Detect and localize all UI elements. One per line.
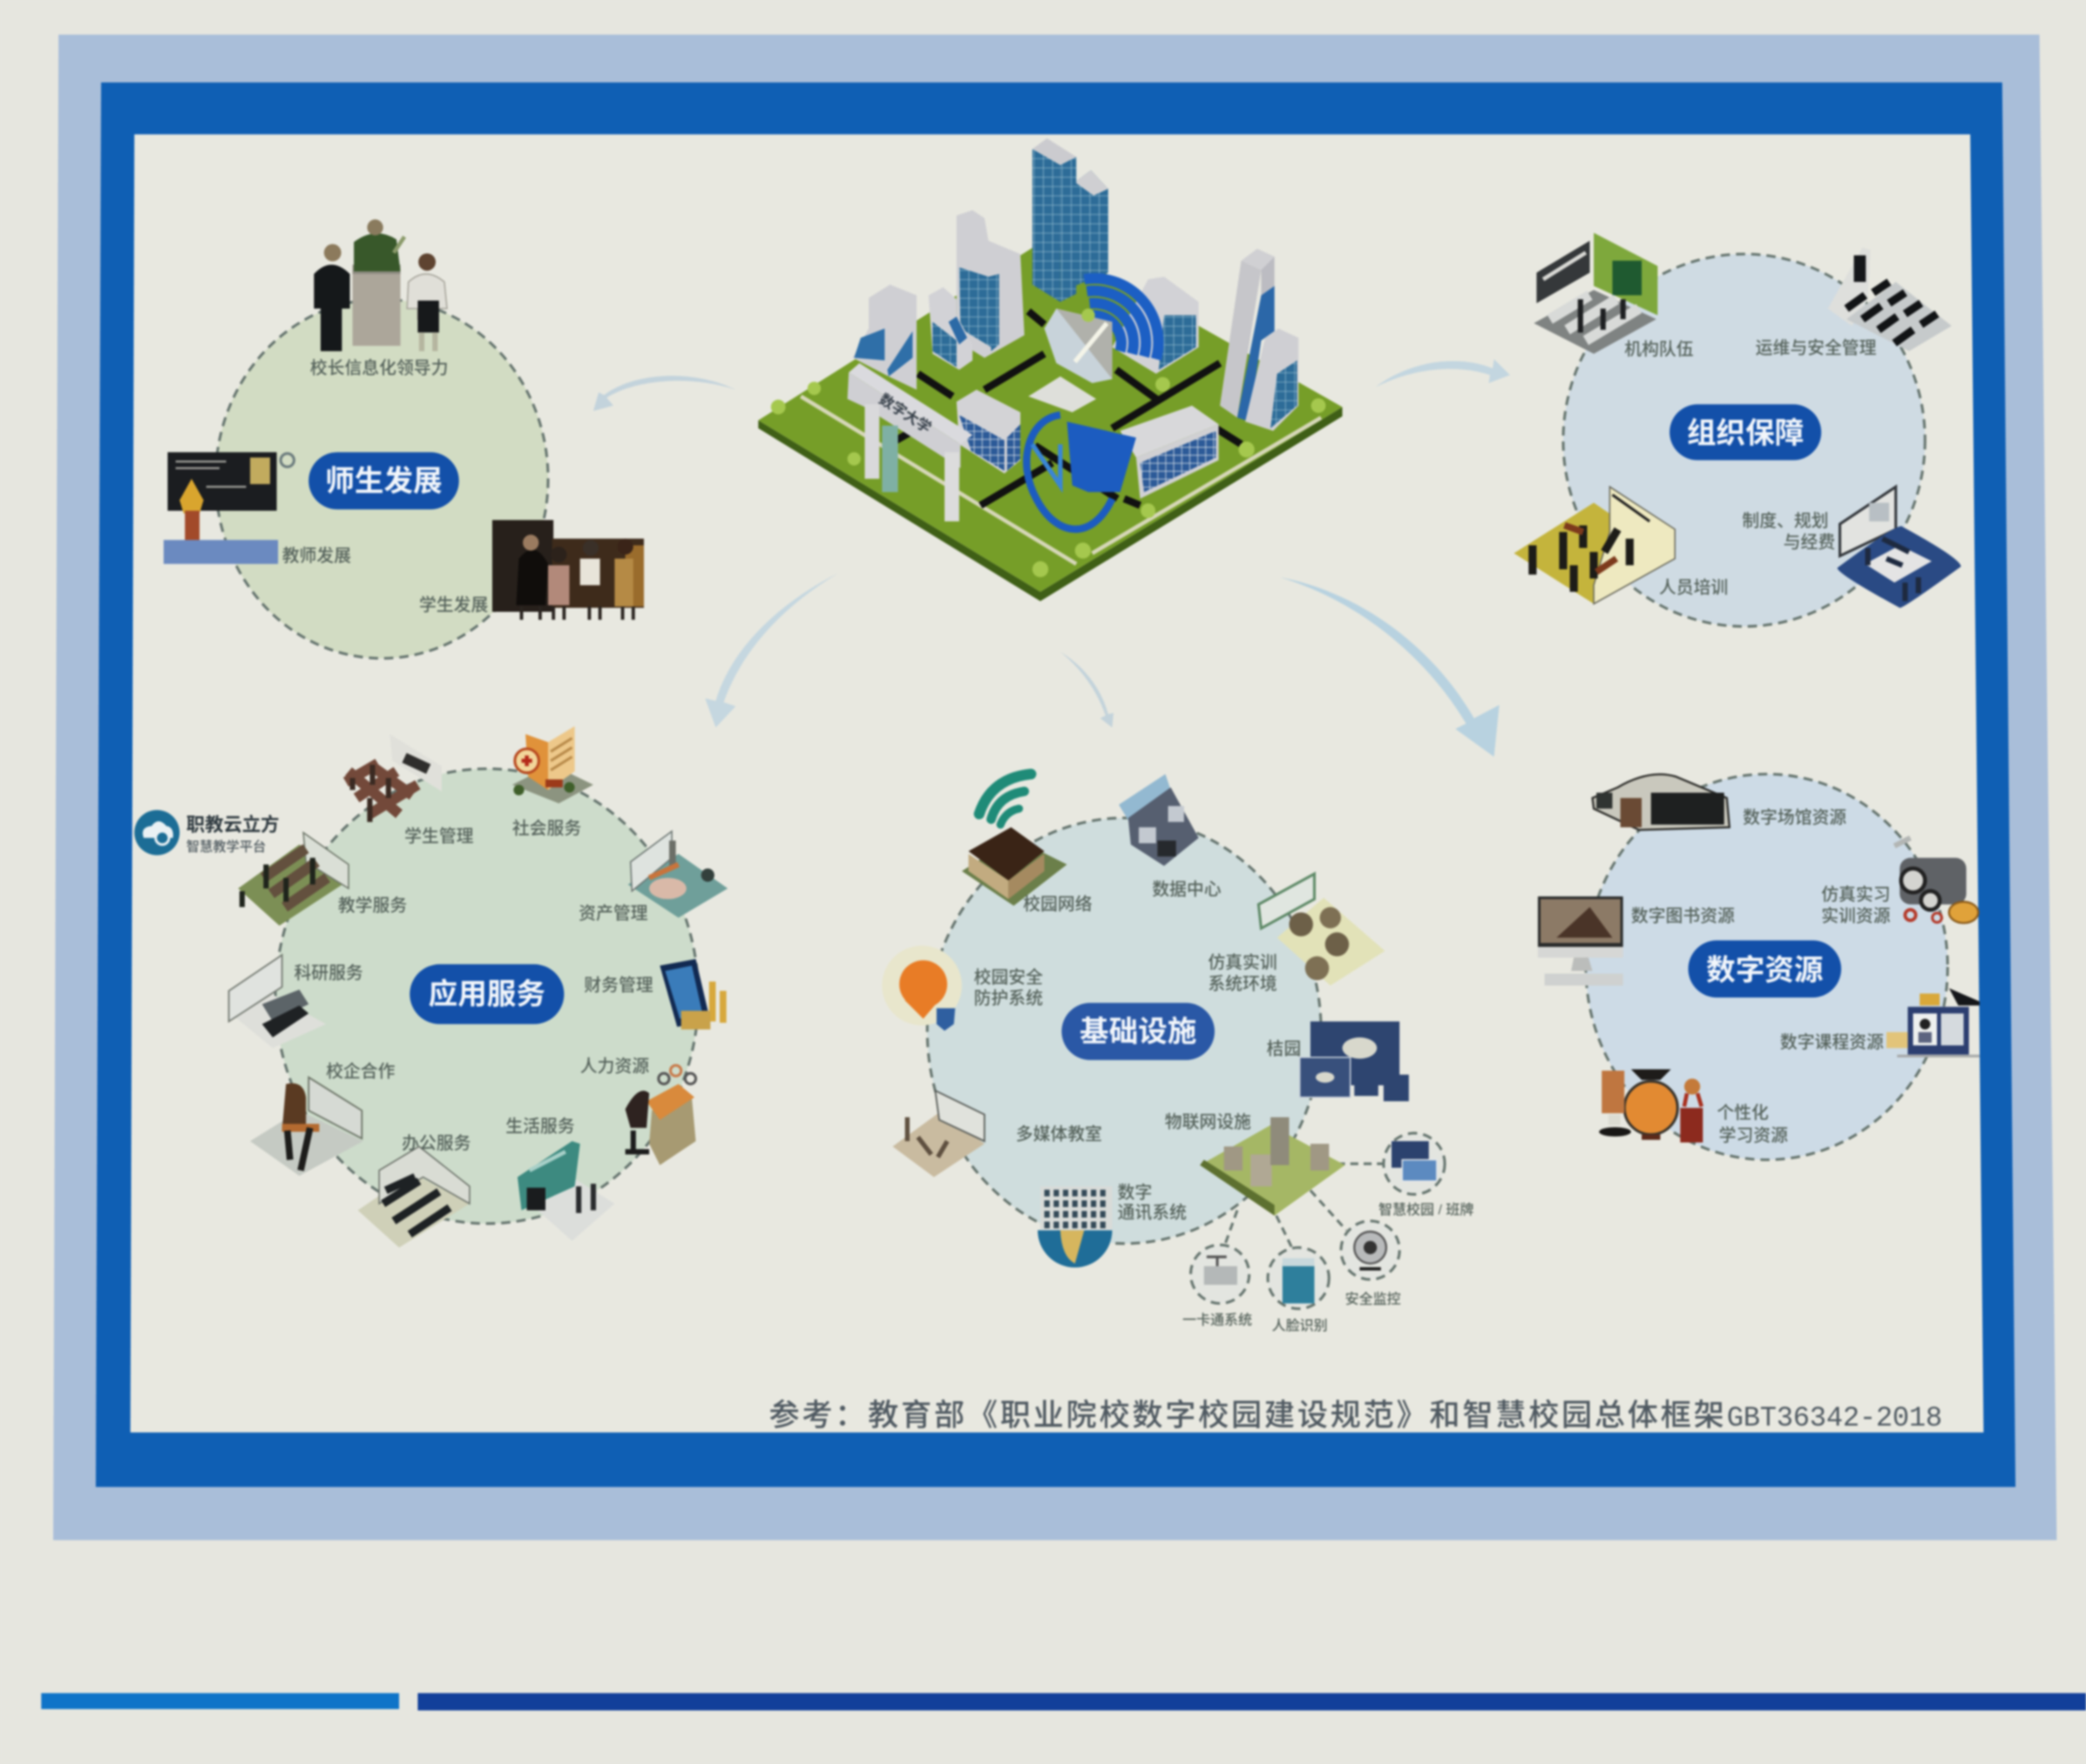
source note: GBT36342-2018: [1727, 1402, 1942, 1435]
icon: one-card system: [1190, 1245, 1250, 1303]
labels: 数据中心: [1152, 881, 1222, 900]
icon: terminals network: [1300, 1022, 1409, 1101]
labels: 制度、规划: [1742, 512, 1829, 531]
icon: student management: [346, 734, 442, 822]
icon: students in library: [492, 520, 644, 619]
labels: 学生发展: [419, 596, 488, 615]
labels: 科研服务: [294, 964, 363, 983]
content panel: [131, 134, 1983, 1432]
labels: 办公服务: [402, 1134, 471, 1153]
satellite dish: [1045, 308, 1112, 383]
icon: school leaders: [314, 220, 447, 351]
panel: 数字资源: [1538, 774, 1980, 1159]
labels: 教学服务: [338, 896, 407, 916]
icon: simulation machinery: [1894, 838, 1978, 923]
labels: 防护系统: [974, 990, 1043, 1009]
icon: operations and security: [1828, 247, 1952, 351]
dashed circle: [275, 768, 699, 1224]
labels: 智慧校园 / 班牌: [1378, 1201, 1473, 1218]
arrow: to 组织保障: [1376, 359, 1510, 387]
labels: 数字图书资源: [1631, 907, 1735, 926]
panel: 组织保障: [1514, 233, 1961, 626]
icon: multimedia classroom: [892, 1091, 985, 1177]
icon: human resources desk: [626, 1065, 696, 1165]
roads: [884, 311, 1241, 505]
icon: office service: [358, 1146, 470, 1247]
icon: digital communication globe: [1038, 1186, 1112, 1267]
labels: 人员培训: [1659, 578, 1728, 598]
panel: 基础设施: [882, 774, 1473, 1334]
pill title: [410, 964, 564, 1024]
icon: digital course book: [1886, 988, 1980, 1058]
campus gate: [848, 363, 972, 522]
left building: [853, 285, 917, 389]
icon: connectors to IoT sub-items: [1224, 1164, 1384, 1250]
shield outline: [1026, 415, 1112, 529]
right tower: [1241, 249, 1275, 270]
pill title: [1688, 940, 1841, 997]
labels: 数字课程资源: [1780, 1033, 1884, 1052]
bottom accent bar: dark blue: [417, 1693, 2086, 1710]
campus base: [758, 407, 1343, 601]
front mid building: [957, 389, 1020, 474]
pill title: [1061, 1003, 1215, 1060]
icon: life service: [518, 1141, 614, 1241]
labels: 一卡通系统: [1182, 1313, 1252, 1328]
labels: [1631, 808, 1891, 1146]
campus gate: 数字大学: [877, 390, 935, 436]
icon: face recognition: [1268, 1247, 1329, 1308]
icon: finance tablet: [660, 959, 727, 1030]
dashed circle: [1563, 254, 1925, 626]
bottom accent bar: light blue: [41, 1693, 399, 1709]
icon: digital venue: [1593, 774, 1730, 830]
labels: 校园安全: [974, 968, 1043, 987]
icon: smart classroom: [1384, 1133, 1445, 1194]
labels: 社会服务: [512, 819, 581, 838]
labels: 物联网设施: [1165, 1113, 1251, 1132]
arrow: to 数字资源: [1280, 578, 1500, 757]
icon: asset management: [628, 831, 728, 917]
icon: IoT campus: [1200, 1118, 1345, 1215]
icon: personalised learning globe: [1599, 1070, 1703, 1143]
labels: 仿真实训: [1208, 954, 1277, 973]
inner frame: dark blue band: [96, 83, 2015, 1487]
icon: data centre: [1119, 774, 1199, 866]
labels: 多媒体教室: [1016, 1125, 1102, 1144]
labels: 资产管理: [579, 904, 648, 923]
labels: 机构队伍: [1624, 341, 1694, 360]
icon: research service: [227, 955, 326, 1048]
pill title: [308, 452, 459, 510]
labels: 校园网络: [1023, 894, 1093, 914]
labels: 数字: [1118, 1184, 1152, 1203]
labels: 个性化: [1717, 1104, 1769, 1123]
labels: 桔园: [1267, 1040, 1301, 1059]
arrow: to 师生发展: [593, 375, 735, 411]
arrow: to 应用服务: [705, 573, 838, 727]
central illustration: isometric smart campus: [758, 139, 1343, 601]
curved building: [957, 210, 1025, 358]
icon: teaching service: [238, 833, 349, 926]
labels: 数字场馆资源: [1743, 808, 1846, 828]
icon: teacher at blackboard: [164, 452, 294, 564]
mid right building: [1112, 277, 1199, 374]
labels: 运维与安全管理: [1756, 339, 1877, 358]
logo: 职教云立方: 智慧教学平台: [186, 839, 266, 855]
pill title: 基础设施: [1080, 1015, 1196, 1048]
dashed circle: [215, 300, 548, 659]
dashed circle: [1586, 774, 1947, 1159]
tall towers: [1075, 170, 1108, 286]
labels: [974, 881, 1473, 1334]
pill title: 师生发展: [325, 464, 443, 497]
labels: 生活服务: [505, 1117, 575, 1136]
labels: 安全监控: [1345, 1290, 1401, 1307]
labels: 系统环境: [1208, 975, 1277, 994]
labels: 仿真实习: [1821, 886, 1891, 905]
icon: school-enterprise cooperation: [250, 1078, 363, 1176]
logo: 职教云立方: 职教云立方: [186, 814, 280, 835]
pill title: 组织保障: [1687, 416, 1804, 449]
icon: social service building: [512, 727, 593, 803]
labels: [1624, 339, 1877, 598]
panel: 应用服务: [134, 727, 728, 1247]
icon: policy and funding: [1837, 487, 1961, 608]
icon: campus network building: [962, 774, 1067, 906]
labels: 与经费: [1784, 533, 1835, 552]
pill title: [1669, 404, 1821, 460]
arrow: to 基础设施: [1060, 652, 1114, 727]
panel: 师生发展: [164, 220, 644, 659]
dashed circle: [927, 818, 1321, 1244]
green garden dots: [771, 308, 1325, 578]
pill title: 应用服务: [429, 978, 545, 1011]
icon: organisation team: [1534, 233, 1657, 354]
labels: 学生管理: [404, 827, 474, 846]
labels: 校企合作: [326, 1063, 396, 1082]
labels: 人力资源: [580, 1058, 649, 1077]
small building: [929, 287, 972, 369]
labels: 实训资源: [1821, 907, 1891, 926]
labels: 学习资源: [1719, 1126, 1788, 1146]
wifi signal arcs: [1084, 279, 1158, 359]
labels: 通讯系统: [1118, 1204, 1187, 1223]
labels: 教师发展: [282, 546, 351, 565]
icon: personnel training: [1514, 487, 1675, 604]
labels: 财务管理: [584, 976, 654, 995]
icon: simulation training environment: [1258, 874, 1385, 985]
labels: 校长信息化领导力: [310, 359, 448, 378]
icon: campus security target: [882, 946, 962, 1031]
labels: [282, 359, 488, 615]
source note: 参考：教育部《职业院校数字校园建设规范》和智慧校园总体框架: [769, 1399, 1724, 1433]
icon: digital library monitor: [1538, 896, 1623, 985]
labels: 人脸识别: [1272, 1318, 1328, 1334]
labels: [294, 819, 654, 1153]
logo: 职教云立方: [134, 810, 280, 855]
pill title: 数字资源: [1706, 954, 1824, 987]
front right building: [1121, 406, 1219, 457]
icon: security camera: [1341, 1221, 1399, 1280]
